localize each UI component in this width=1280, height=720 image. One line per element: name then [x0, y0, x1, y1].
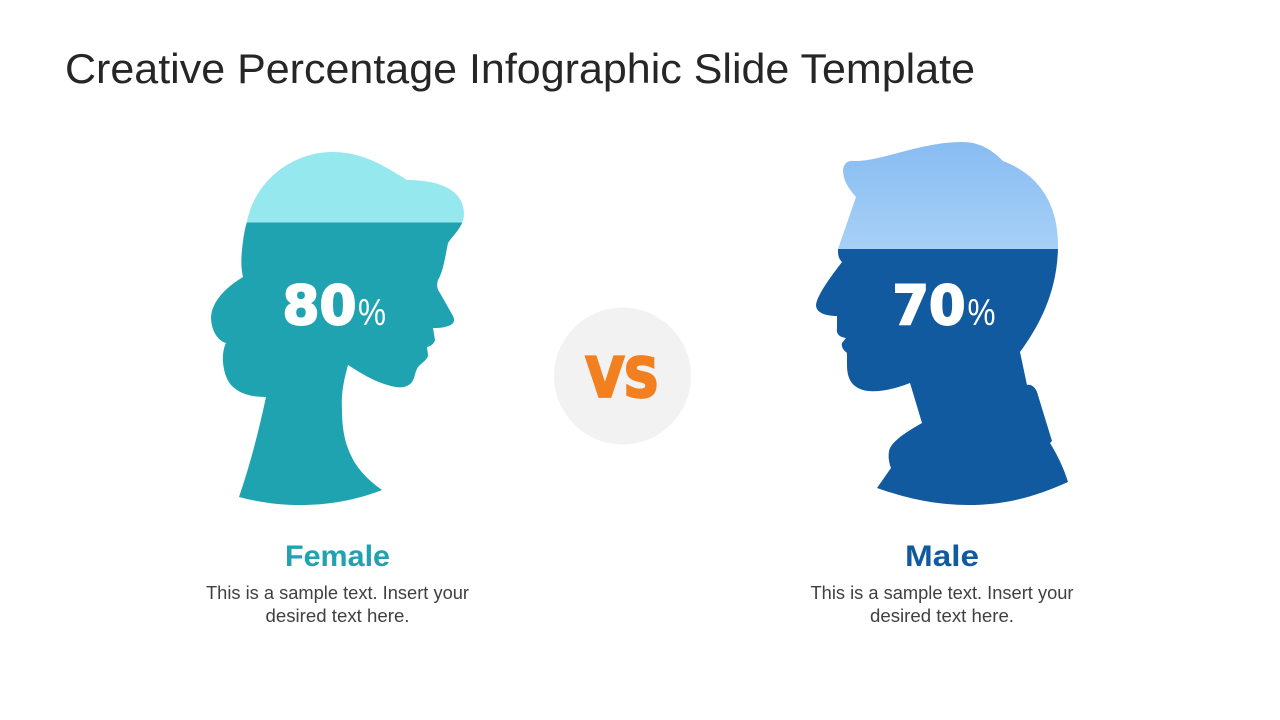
female heading: Female: [285, 540, 390, 573]
male description: [810, 582, 1074, 626]
male percentage: %: [968, 292, 996, 333]
male percentage: 70: [892, 274, 966, 337]
badge: versus: VS: [586, 346, 659, 410]
icon: male head silhouette: [816, 142, 1068, 505]
female description: desired text here.: [266, 605, 410, 626]
badge: versus: [554, 308, 691, 444]
panel: male: [810, 142, 1074, 626]
title: Creative Percentage Infographic Slide Template: [65, 45, 975, 92]
female description: [206, 582, 469, 626]
female percentage: 80: [282, 274, 356, 337]
male description: desired text here.: [870, 605, 1014, 626]
panel: female: [206, 152, 469, 626]
male heading: Male: [905, 540, 979, 573]
female description: This is a sample text. Insert your: [206, 582, 469, 603]
icon: female head silhouette: [211, 152, 464, 505]
female percentage: %: [358, 292, 386, 333]
male description: This is a sample text. Insert your: [810, 582, 1074, 603]
